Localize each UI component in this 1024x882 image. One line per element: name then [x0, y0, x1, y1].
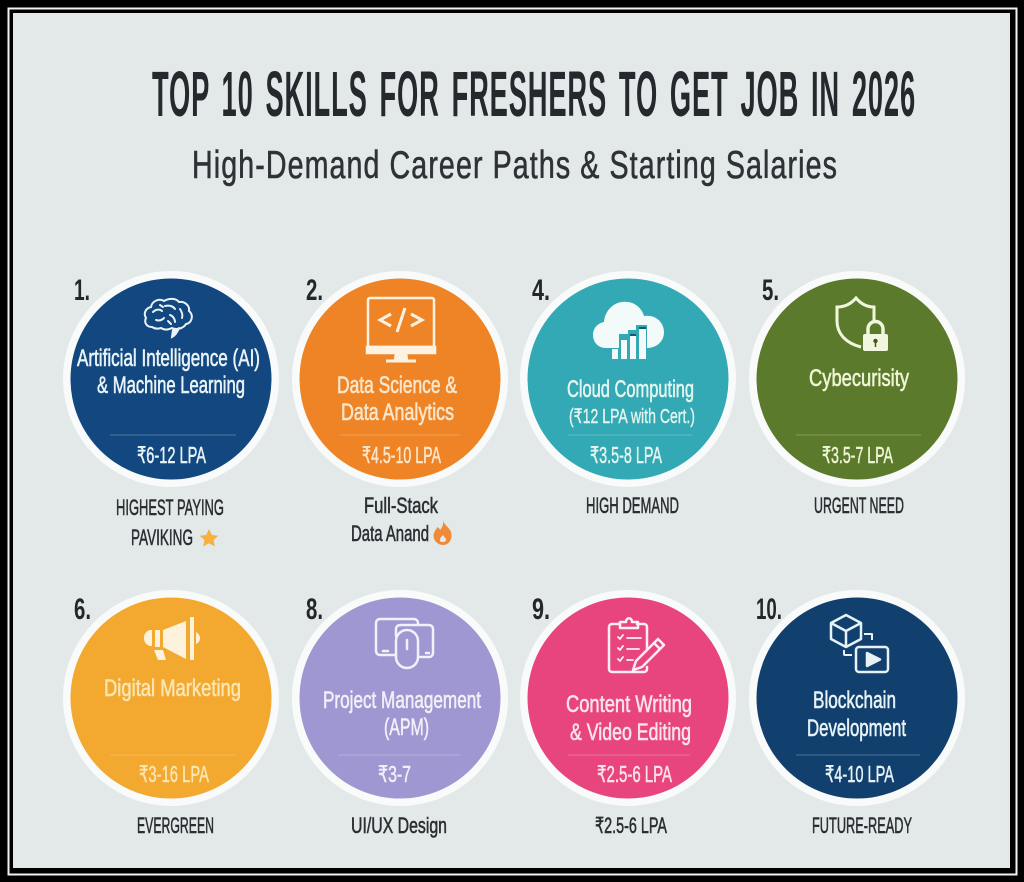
icon: devices and mouse	[376, 619, 433, 668]
icon: clipboard and pencil	[609, 618, 664, 672]
panel: skill 6 digital marketing	[63, 590, 279, 838]
circle badge	[63, 590, 279, 806]
skill name: Digital Marketing	[104, 675, 241, 702]
number: 4.	[532, 274, 550, 307]
icon: monitor with code	[367, 298, 435, 361]
number: 6.	[74, 593, 91, 626]
circle badge	[520, 271, 736, 487]
caption: HIGH DEMAND	[586, 493, 679, 518]
number: 8.	[306, 593, 323, 626]
skill name: Development	[807, 715, 906, 742]
number: 1.	[74, 274, 90, 307]
panel: skill 2 data science	[292, 271, 508, 546]
caption: Full-Stack	[364, 493, 439, 518]
skill name	[807, 687, 906, 742]
skill name	[567, 376, 695, 428]
panel: skill 10 blockchain	[749, 590, 965, 838]
skill name: Cloud Computing	[567, 376, 694, 403]
salary: ₹6-12 LPA	[137, 442, 206, 468]
caption	[351, 493, 439, 546]
circle badge	[749, 271, 965, 487]
skill name: Content Writing	[566, 691, 692, 718]
skill name: & Video Editing	[570, 719, 691, 746]
icon: megaphone	[144, 617, 200, 660]
salary: ₹3-7	[378, 761, 411, 787]
caption: EVERGREEN	[137, 813, 214, 838]
skill name: Blockchain	[813, 687, 896, 714]
salary: ₹2.5-6 LPA	[597, 761, 672, 787]
skill name: (APM)	[384, 714, 429, 741]
salary: ₹3.5-7 LPA	[822, 442, 893, 468]
number: 2.	[306, 274, 323, 307]
icon: cube and video	[831, 615, 888, 672]
skill name	[77, 345, 260, 399]
panel: skill 4 cloud computing	[520, 271, 736, 518]
panel: skill 5 cybersecurity	[749, 271, 965, 518]
circle badge	[292, 271, 508, 487]
icon: shield with lock	[837, 298, 888, 351]
skill name: Data Analytics	[341, 399, 454, 426]
panel: skill 9 content writing	[520, 590, 736, 838]
icon: cloud with bars	[593, 302, 664, 359]
caption: PAVIKING	[131, 525, 193, 550]
icon: star	[200, 529, 218, 547]
skill name: Artificial Intelligence (AI)	[77, 345, 260, 372]
caption: ₹2.5-6 LPA	[595, 813, 667, 838]
salary: ₹3.5-8 LPA	[590, 442, 662, 468]
circle badge	[520, 590, 736, 806]
caption: UI/UX Design	[351, 813, 447, 838]
caption: URGENT NEED	[814, 493, 904, 518]
skill name	[323, 687, 481, 741]
skill name: (₹12 LPA with Cert.)	[569, 406, 695, 428]
skill name: Cybecurisity	[809, 365, 909, 392]
circle badge	[63, 271, 279, 487]
salary: ₹3-16 LPA	[139, 761, 209, 787]
number: 9.	[532, 593, 550, 626]
number: 10.	[756, 593, 782, 626]
skill name	[337, 372, 457, 426]
caption: Data Anand	[351, 521, 429, 546]
skill name	[566, 691, 692, 746]
circle badge	[292, 590, 508, 806]
salary: ₹4-10 LPA	[825, 761, 894, 787]
caption: HIGHEST PAYING	[116, 495, 224, 520]
salary: ₹4.5-10 LPA	[362, 442, 441, 468]
icon: flame	[434, 520, 452, 545]
icon: brain	[145, 299, 192, 337]
skill name: Project Management	[323, 687, 481, 714]
skill name: & Machine Learning	[97, 372, 245, 399]
number: 5.	[762, 274, 779, 307]
panel: skill 1 artificial intelligence	[63, 271, 279, 550]
panel: skill 8 project management	[292, 590, 508, 838]
skill name: Data Science &	[337, 372, 457, 399]
circle badge	[749, 590, 965, 806]
caption	[116, 495, 224, 550]
caption: FUTURE-READY	[812, 813, 912, 838]
